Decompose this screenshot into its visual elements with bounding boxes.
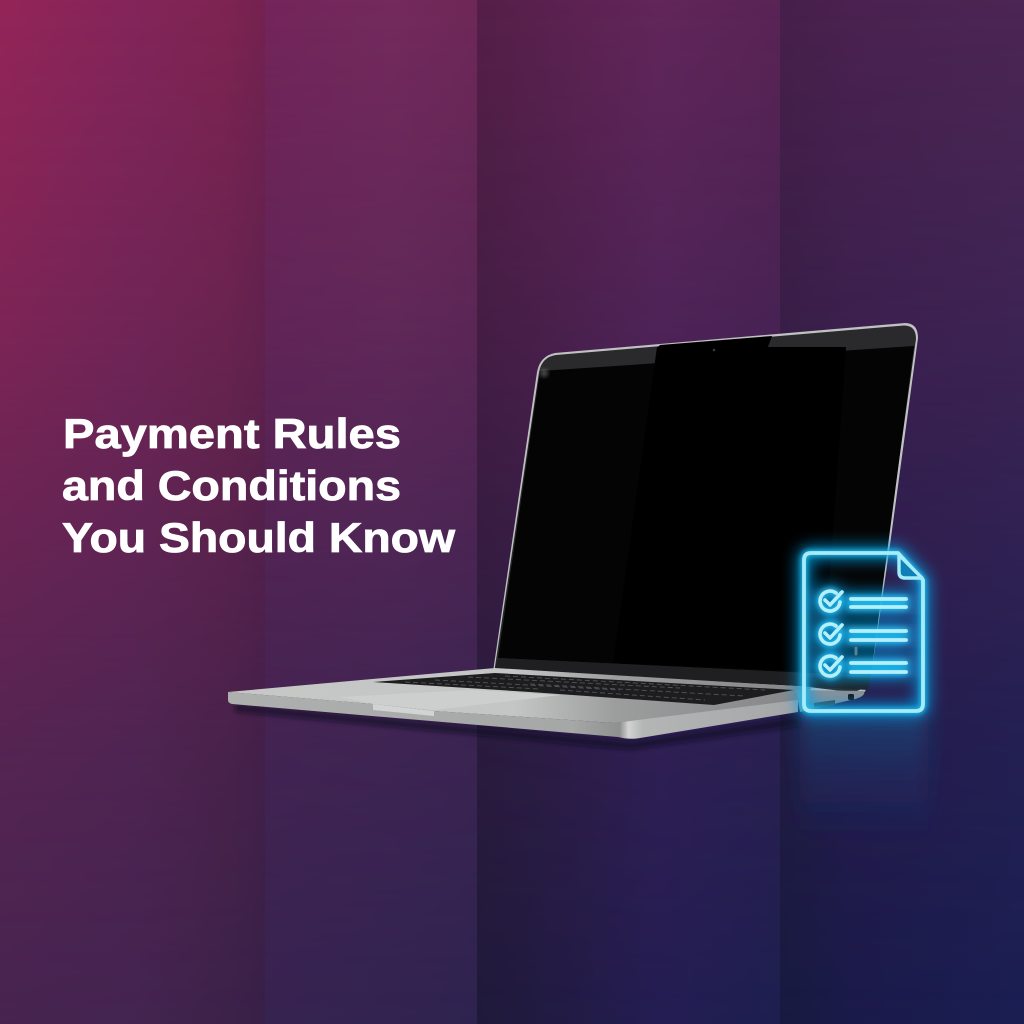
screen	[498, 346, 914, 676]
small cursor mark	[854, 648, 858, 654]
laptop shadow	[235, 704, 800, 750]
neon document icon	[800, 553, 928, 840]
checklist row 3	[820, 656, 906, 676]
title: and Conditions	[62, 462, 401, 509]
document outline	[804, 553, 923, 711]
screen bottom bezel	[495, 658, 871, 690]
laptop base front edge	[228, 692, 798, 739]
title: Payment Rules	[63, 410, 401, 457]
checklist row 1	[820, 591, 906, 611]
bezel notch top	[657, 336, 772, 356]
title: You Should Know	[62, 514, 455, 561]
folded corner	[899, 555, 922, 578]
keyboard	[373, 673, 794, 705]
title	[62, 410, 455, 561]
icon wide glow	[804, 553, 923, 711]
webcam dot	[713, 349, 715, 351]
laptop side with ports	[796, 690, 864, 712]
trackpad edge	[340, 690, 560, 710]
laptop	[228, 323, 918, 750]
icon tight glow	[804, 553, 923, 711]
reflected glow	[800, 715, 928, 840]
checklist row 2	[820, 624, 906, 644]
laptop lid	[493, 323, 918, 699]
corner glint	[540, 369, 548, 377]
trackpad notch	[373, 704, 434, 716]
screen dark reflection band	[613, 347, 846, 672]
laptop base top deck	[228, 668, 812, 723]
